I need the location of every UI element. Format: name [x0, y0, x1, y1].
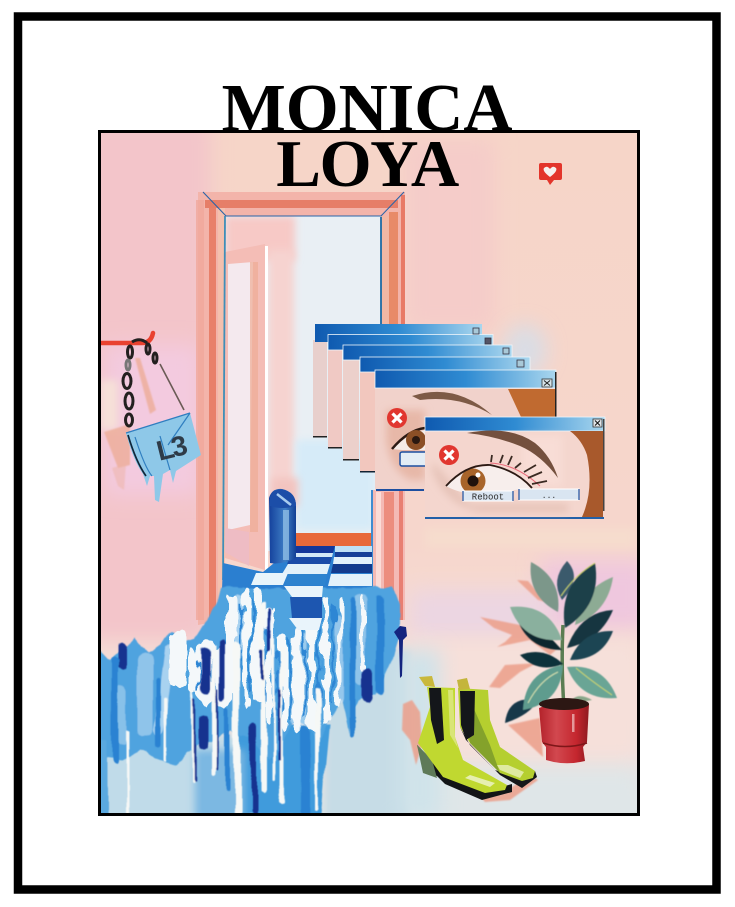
button: ellipsis [519, 489, 579, 501]
title-bar close boxes [473, 328, 524, 367]
tiled floor [222, 546, 372, 590]
trash can [269, 489, 296, 563]
potted plant [505, 561, 617, 763]
bag body [126, 413, 201, 502]
button: Reboot [463, 491, 513, 502]
bag logo: L3 [153, 429, 190, 467]
eyebrow [467, 431, 558, 478]
melting blue floor drips [98, 588, 398, 815]
navy drips [122, 610, 380, 812]
stack of pop-up windows [313, 324, 605, 519]
window 3 [343, 345, 512, 460]
orange baseboard [295, 533, 371, 546]
window 4 [360, 357, 530, 472]
floor under the melt [96, 650, 440, 825]
painting [85, 120, 650, 830]
eyelashes [491, 455, 547, 484]
button: Reboot: Reboot [472, 492, 504, 502]
painting frame [100, 132, 638, 814]
pot [539, 698, 589, 763]
window 5 with eye [375, 370, 556, 491]
green boots [417, 676, 537, 800]
window 2 [328, 334, 493, 448]
open door leaf [225, 244, 268, 572]
door frame [196, 192, 405, 625]
handbag hanging on hook [100, 333, 201, 502]
right boot [457, 678, 537, 788]
bag shadow [104, 358, 156, 490]
eye [446, 466, 530, 494]
navy drip on the wall [394, 626, 407, 678]
left boot [417, 676, 512, 800]
coral plant and boot shadows [402, 580, 556, 802]
stem [562, 625, 564, 708]
leaves [505, 561, 617, 723]
front window with eye [425, 417, 605, 519]
window 1 [313, 324, 482, 438]
title line: MONICA: MONICA [222, 70, 512, 146]
skin shading [432, 462, 568, 512]
brown hair [570, 431, 603, 517]
red close icon [439, 445, 459, 465]
marbling, light [122, 600, 360, 740]
doorway interior [225, 216, 381, 572]
icon: like notification heart [539, 163, 562, 185]
hook [100, 333, 153, 343]
mid-blue drips [116, 600, 380, 810]
title [222, 70, 512, 201]
tile remnants in melt [284, 586, 323, 630]
white marbled centre [178, 592, 362, 730]
title line: LOYA: LOYA [276, 127, 459, 201]
chain [123, 340, 184, 426]
lower right jamb [371, 490, 405, 620]
long drips [116, 600, 380, 812]
wall background [100, 133, 637, 813]
button: ellipsis: ... [542, 492, 556, 501]
wall colour washes [101, 133, 637, 800]
